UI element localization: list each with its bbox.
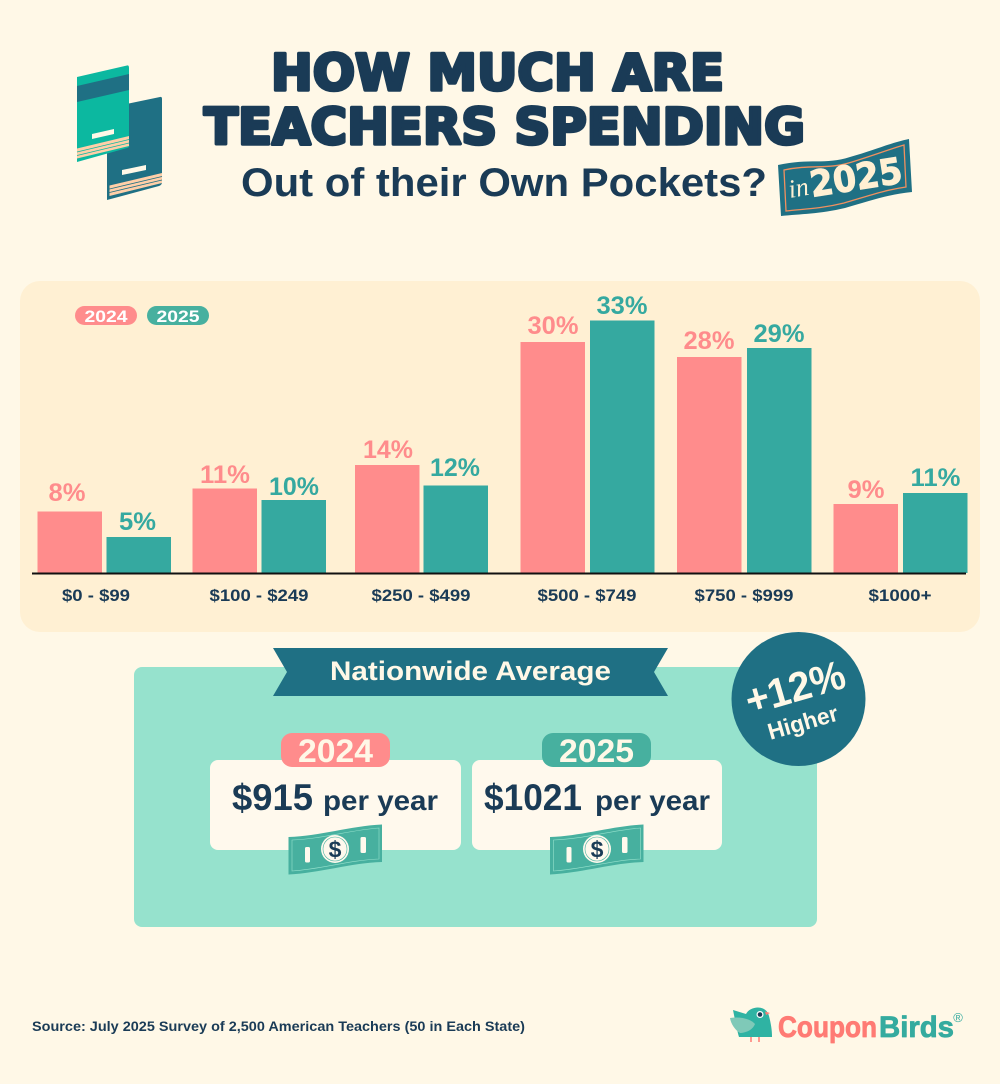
card: 2025 [472, 733, 722, 850]
value labels 2025: 12% [430, 454, 480, 482]
value labels 2025: 29% [754, 320, 804, 348]
banner: nationwide average [273, 648, 668, 696]
icon: banknote 2024 [288, 824, 382, 874]
logo: CouponBirds: ® [953, 1010, 963, 1025]
panel: bar chart [20, 281, 980, 632]
logo: CouponBirds [730, 1008, 963, 1044]
value labels 2024: 14% [363, 436, 413, 464]
logo: CouponBirds: Birds [879, 1011, 954, 1044]
value labels 2025: 33% [596, 292, 648, 320]
logo: CouponBirds: Coupon [778, 1011, 877, 1044]
value labels 2024: 30% [528, 312, 578, 340]
card: 2025: per year [595, 785, 710, 816]
value labels 2025: 11% [910, 464, 960, 492]
icon: banknote 2025: $ [591, 836, 604, 862]
icon: banknote 2025 [550, 824, 644, 874]
card: 2024: 2024 [298, 733, 373, 769]
value labels 2025: 5% [119, 508, 156, 536]
value labels 2024 [48, 312, 884, 507]
value labels 2025 [119, 292, 960, 536]
card: 2025: $1021 [484, 777, 582, 818]
legend: 2024 [84, 307, 128, 326]
value labels 2024: 28% [684, 327, 734, 355]
card: 2025: 2025 [559, 733, 634, 769]
badge: in 2025: 2025 [807, 151, 905, 206]
category labels: $100 - $249 [210, 586, 308, 605]
badge: +12% higher: Higher [765, 700, 841, 745]
bars 2024 [38, 342, 898, 573]
category labels [62, 586, 932, 605]
value labels 2024: 8% [48, 479, 86, 507]
banner: nationwide average: Nationwide Average [330, 656, 611, 686]
title: TEACHERS SPENDING [204, 98, 805, 156]
badge: in 2025: in [786, 172, 811, 204]
title: HOW MUCH ARE [271, 44, 724, 102]
axis line [32, 572, 966, 574]
badge: +12% higher: +12% [740, 651, 851, 724]
category labels: $250 - $499 [372, 586, 470, 605]
badge: in 2025 [778, 139, 912, 216]
card: 2024 [210, 733, 461, 850]
legend [75, 306, 209, 326]
panel: nationwide average [134, 667, 817, 927]
category labels: $750 - $999 [694, 586, 794, 605]
value labels 2024: 9% [848, 476, 884, 504]
category labels: $500 - $749 [538, 586, 636, 605]
category labels: $0 - $99 [62, 586, 130, 605]
category labels: $1000+ [868, 586, 932, 605]
icon: books [77, 65, 162, 200]
badge: +12% higher [732, 632, 866, 766]
card: 2024: per year [323, 785, 438, 816]
value labels 2024: 11% [200, 461, 250, 489]
value labels 2025: 10% [269, 473, 319, 501]
legend: 2025 [156, 307, 200, 326]
card: 2024: $915 [232, 777, 313, 818]
title [204, 44, 805, 156]
source text: Source: July 2025 Survey of 2,500 American Teachers (50 in Each State) [32, 1019, 525, 1034]
bars 2025 [106, 320, 968, 573]
icon: banknote 2024: $ [329, 836, 342, 862]
subtitle: Out of their Own Pockets? [241, 161, 767, 205]
